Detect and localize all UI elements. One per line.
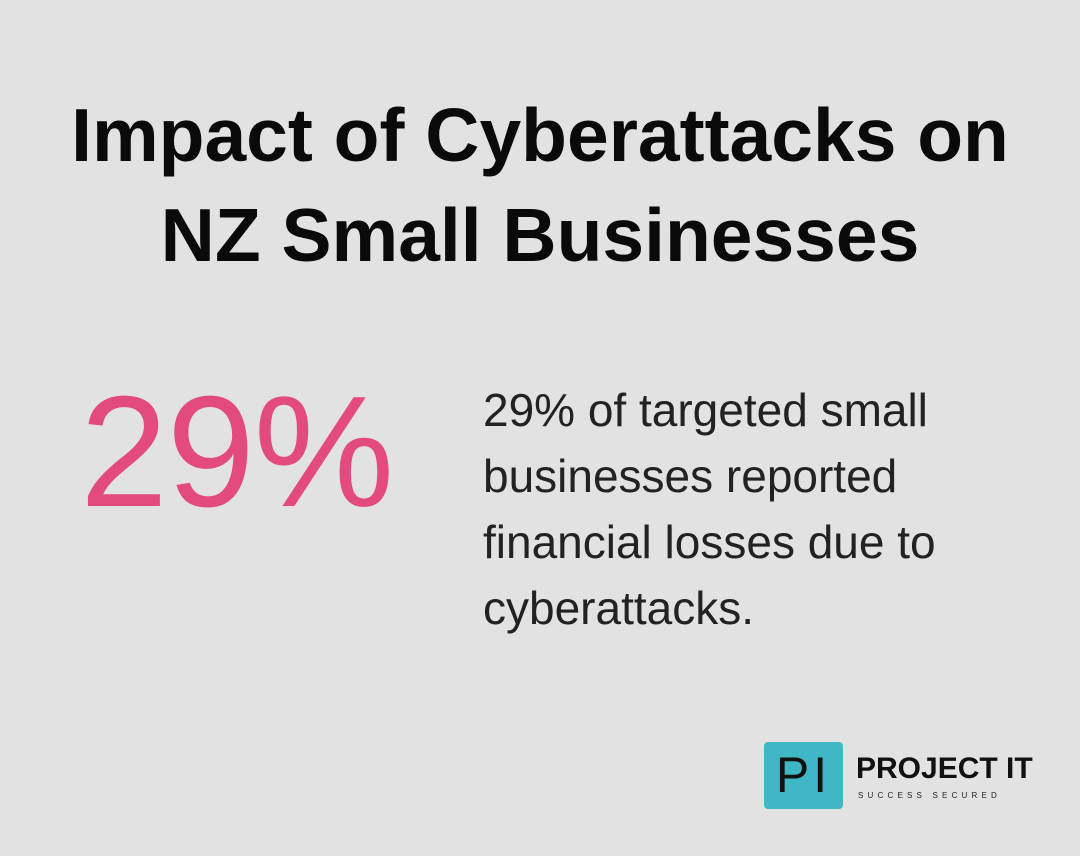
brand name: PROJECT IT <box>856 752 1033 785</box>
title <box>71 93 1009 277</box>
logo: Project IT <box>764 742 1033 809</box>
title: NZ Small Businesses <box>161 193 919 277</box>
tagline: SUCCESS SECURED <box>858 791 1001 800</box>
icon: PI box <box>764 742 843 809</box>
icon: PI box: PI <box>776 747 831 803</box>
title: Impact of Cyberattacks on <box>71 93 1009 177</box>
description text: 29% of targeted small businesses reported financial losses due to cyberattacks. <box>483 384 936 634</box>
big stat: 29%: 29% <box>80 364 393 540</box>
